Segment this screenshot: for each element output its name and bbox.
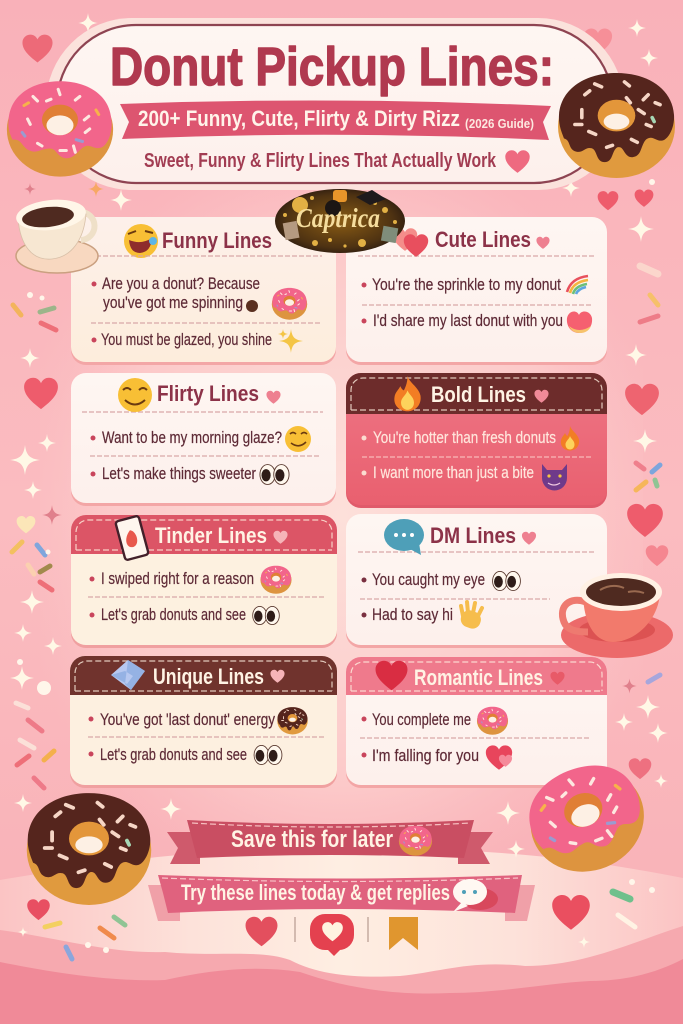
line items <box>362 275 563 330</box>
icon: red coffee cup <box>561 573 673 658</box>
tagline: Sweet, Funny & Flirty Lines That Actually Work <box>144 150 497 172</box>
icon row: like, heart bubble, bookmark <box>246 914 418 956</box>
line items: Want to be my morning glaze? <box>102 428 282 447</box>
icon: bookmark <box>389 917 418 950</box>
subtitle ribbon: (2026 Guide) <box>465 117 534 131</box>
icon: heart <box>273 531 288 544</box>
icon: heart <box>270 670 285 683</box>
icon: pink donut top left <box>7 81 113 177</box>
line items: You complete me <box>372 710 471 729</box>
line items: I want more than just a bite <box>373 463 534 482</box>
line items <box>90 569 254 624</box>
icon: peach <box>567 312 592 333</box>
icon: rainbow <box>567 276 588 294</box>
line items: You must be glazed, you shine <box>101 330 272 349</box>
panel: dm lines <box>346 514 607 648</box>
icon: small flame <box>561 426 579 450</box>
heading: Tinder Lines <box>155 523 267 548</box>
line items: I'd share my last donut with you <box>373 311 563 330</box>
banner: save this for later <box>167 820 493 864</box>
icon: flame <box>394 376 421 411</box>
heading: Bold Lines <box>431 382 526 407</box>
panel: bold lines <box>346 373 607 508</box>
heading: Romantic Lines <box>414 665 543 690</box>
icon: donut <box>399 826 432 856</box>
subtitle ribbon <box>120 100 551 140</box>
line items: Let's make things sweeter <box>102 464 256 483</box>
panel: cute lines <box>346 217 607 365</box>
icon: mini donut <box>246 300 258 312</box>
logo: Captrica <box>275 189 405 253</box>
icon: devil <box>542 464 567 490</box>
line items: You caught my eye <box>372 570 485 589</box>
icon: eyes <box>493 571 520 591</box>
icon: heart <box>550 672 565 685</box>
panel: romantic lines <box>346 657 607 788</box>
heading: Cute Lines <box>435 227 531 252</box>
line items <box>92 274 272 349</box>
icon: heart <box>536 237 550 249</box>
heading: DM Lines <box>430 523 516 548</box>
line items <box>362 710 479 765</box>
line items <box>88 710 275 764</box>
panel: tinder lines <box>71 515 337 648</box>
line items: You're hotter than fresh donuts <box>373 428 556 447</box>
icon: chocolate donut bottom left <box>27 793 151 905</box>
icon: waving hand <box>459 602 483 631</box>
icon: diamond <box>111 660 145 690</box>
icon: heart <box>246 917 277 946</box>
icon: heart <box>522 532 536 545</box>
icon: eyes <box>253 606 279 625</box>
subtitle ribbon: 200+ Funny, Cute, Flirty & Dirty Rizz <box>138 106 460 131</box>
line items: Had to say hi <box>372 605 453 624</box>
icon: hearts beside cute heading <box>393 228 428 257</box>
line items: You're the sprinkle to my donut <box>372 275 561 294</box>
icon: sparkles <box>278 329 303 353</box>
icon: chocolate donut top right <box>558 73 675 178</box>
panel: flirty lines <box>71 373 336 506</box>
line items <box>362 570 485 624</box>
line items: I'm falling for you <box>372 746 479 765</box>
header badge <box>46 18 624 190</box>
icon: smiling emoji <box>118 378 152 412</box>
icon: donut <box>272 288 307 320</box>
icon: donut <box>477 707 508 735</box>
icon: red heart <box>376 661 407 690</box>
title: Donut Pickup Lines: <box>110 37 554 97</box>
icon: heart <box>266 391 281 404</box>
line items: you've got me spinning <box>103 293 243 312</box>
icon: chat bubble <box>384 519 424 555</box>
line items: Are you a donut? Because <box>102 274 260 293</box>
panel: unique lines <box>70 656 337 788</box>
line items: Let's grab donuts and see <box>100 745 247 764</box>
line items: I swiped right for a reason <box>101 569 254 588</box>
icon: white coffee cup <box>15 196 98 273</box>
icon: eyes <box>254 745 282 765</box>
line items <box>90 428 282 483</box>
banner: save this for later: Save this for later <box>231 826 393 853</box>
icon: donut <box>260 566 292 594</box>
banner: try these lines <box>148 875 535 921</box>
line items <box>362 428 556 482</box>
heading: Flirty Lines <box>157 381 259 406</box>
icon: laughing emoji <box>124 224 158 258</box>
logo: Captrica: Captrica <box>296 203 380 233</box>
panel: funny lines <box>71 217 336 365</box>
icon: heart <box>534 390 549 403</box>
heading: Funny Lines <box>162 228 272 253</box>
icon: tagline heart <box>505 150 530 173</box>
icon: heart bubble <box>310 914 354 956</box>
banner: try these lines: Try these lines today & get replies <box>181 880 450 905</box>
line items: You've got 'last donut' energy <box>100 710 275 729</box>
icon: double heart <box>486 745 512 770</box>
line items: Let's grab donuts and see <box>101 605 246 624</box>
heading: Unique Lines <box>153 664 264 689</box>
icon: chat bubble <box>453 879 498 912</box>
icon: pink donut bottom right <box>514 750 660 889</box>
icon: smile emoji <box>285 426 311 452</box>
icon: eyes <box>260 465 289 484</box>
icon: phone <box>115 516 149 560</box>
icon: chocolate donut <box>277 707 308 734</box>
